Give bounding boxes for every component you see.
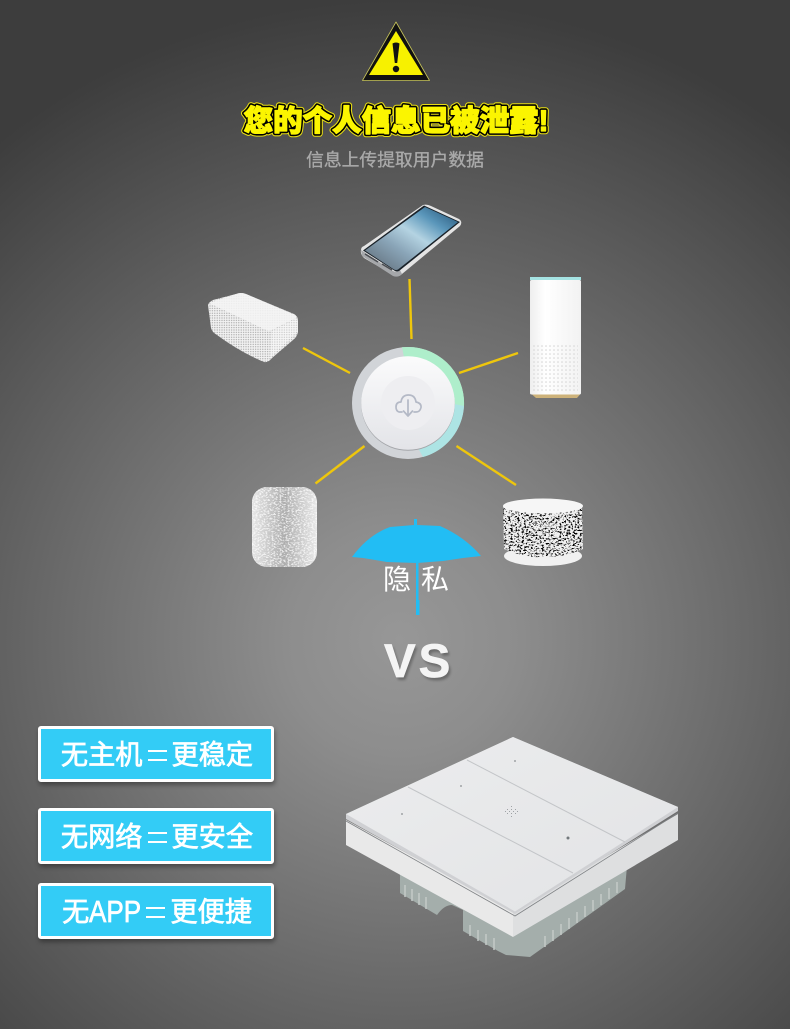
- vs heading: VS: [384, 635, 453, 688]
- vs heading: VS: [386, 638, 455, 691]
- button: no app: [38, 883, 274, 939]
- icon: warning triangle: [362, 22, 430, 80]
- title: 您的个人信息已被泄露!: [244, 104, 548, 138]
- umbrella label: 私: [421, 564, 449, 595]
- icon: cloud download: [396, 395, 421, 416]
- device: tower speaker: [530, 277, 581, 398]
- base frame: [346, 820, 513, 937]
- icon: privacy umbrella: [352, 519, 481, 615]
- subtitle: 信息上传提取用户数据: [306, 150, 484, 170]
- hub device: [352, 347, 464, 459]
- back box: [400, 866, 627, 957]
- button: no app: 无 更便捷: [62, 896, 252, 927]
- button: no app: APP: [89, 894, 141, 929]
- button: no network: [38, 808, 274, 864]
- connector lines: [303, 279, 518, 485]
- top plate: [346, 737, 678, 914]
- device: smartphone: [361, 205, 461, 277]
- product: smart wall switch: [346, 737, 678, 957]
- title: 您的个人信息已被泄露!: [244, 104, 548, 138]
- device: box speaker: [208, 293, 298, 362]
- device: puck speaker: [503, 498, 583, 566]
- button: no hub: [38, 726, 274, 782]
- button: no hub: 无主机 更稳定: [61, 739, 253, 770]
- umbrella label: 隐: [383, 564, 411, 595]
- title: 您的个人信息已被泄露!: [244, 104, 548, 138]
- button: no network: 无网络 更安全: [61, 821, 253, 852]
- device: round mesh speaker: [252, 487, 317, 567]
